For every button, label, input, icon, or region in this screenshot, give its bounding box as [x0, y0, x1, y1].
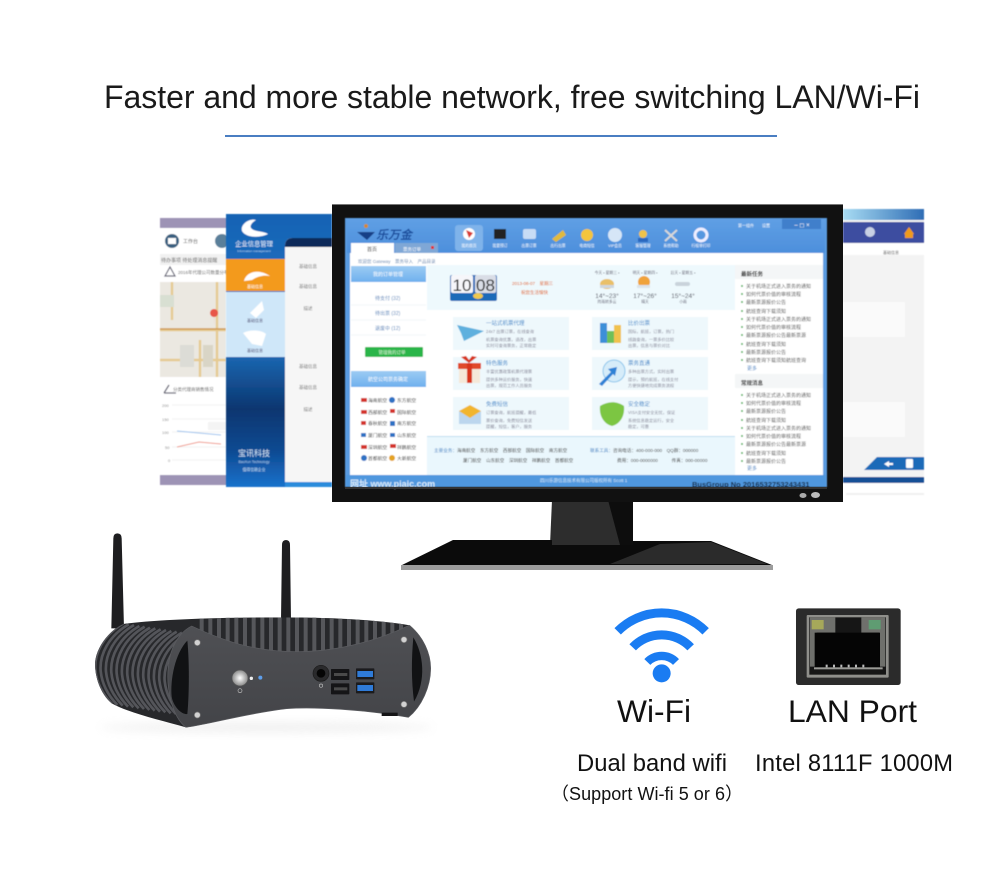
map [160, 282, 226, 377]
right sidebar news lists: 更多 [747, 465, 757, 472]
weather forecast [595, 270, 696, 304]
left column: my tickets: 待支付 (32) [375, 295, 401, 302]
monitor screen: flight booking software: 欢迎您 Gateway 票务导入 产品目录 [358, 258, 436, 265]
toolbar icons: 客服管理 [635, 243, 651, 248]
right sidebar news lists: 关于机场正式进入票务的通知 [746, 392, 811, 399]
Wi-Fi support note: （Support Wi-fi 5 or 6） [551, 784, 743, 804]
icon: gift box [458, 356, 481, 383]
monitor [332, 204, 843, 570]
service cards: 出票，规范工作人员服务 [486, 382, 533, 389]
right sidebar news lists: 最新票源报价公告 [746, 299, 786, 306]
toolbar icons: 行程单打印 [692, 243, 711, 248]
panel: right app window behind monitor [843, 209, 924, 495]
weather forecast: 今天 • 星期三 • [595, 270, 620, 275]
panel: enterprise information app window: 基础信息 [299, 363, 317, 370]
weather forecast: 17°~26° [633, 292, 657, 300]
toolbar icons: 我的首页 [461, 243, 477, 248]
monitor screen: flight booking software [345, 218, 827, 489]
panel: dashboard app window behind monitor: 分类代理商销售情况 [173, 386, 214, 393]
title underline [225, 135, 777, 137]
weather forecast: 明天 • 星期四 • [633, 270, 658, 275]
toolbar icons: 系统帮助 [663, 243, 679, 248]
toolbar icons: 出票订票 [521, 243, 537, 248]
right sidebar news lists: 关于机场正式进入票务的通知 [746, 316, 811, 323]
service cards: 一站式机票代理 [486, 319, 525, 327]
service cards: 实时可查询票务，正常稳定 [486, 342, 536, 349]
panel: enterprise information app window: 企业信息管理 [235, 239, 274, 248]
line chart: 150 [162, 417, 169, 422]
icon: paper plane [457, 325, 484, 341]
service cards: 稳定，可靠 [628, 423, 649, 430]
screen bottom edge shadow [345, 487, 827, 489]
panel: enterprise information app window: 基础信息 [299, 283, 317, 290]
right sidebar news lists: 更多 [747, 365, 757, 372]
bottom contact strip: 费用：000-0000000 传真：000-00000 [617, 457, 708, 464]
line chart [162, 403, 232, 463]
weather forecast: 阵雨转多云 [598, 299, 617, 304]
panel: dashboard app window behind monitor: 工作台 [183, 238, 198, 245]
monitor stand neck [550, 500, 633, 546]
right sidebar news lists: 常规消息 [741, 379, 764, 387]
panel: enterprise information app window: 值得信赖企业 [243, 467, 266, 472]
service cards: 提示，预约航班，在线支付 [628, 376, 678, 383]
tabs: 首页 [367, 246, 377, 253]
title: Faster and more stable network, free switching LAN/Wi-Fi [104, 79, 920, 115]
left column: airlines: 山东航空 [397, 432, 416, 439]
service cards: 比价出票 [628, 319, 651, 327]
left column: airlines: 南方航空 [397, 420, 416, 427]
right sidebar news lists [735, 265, 823, 475]
service cards: 订票查询，航班提醒，最低 [486, 409, 537, 416]
right sidebar news lists: 最新票源报价公告最新票源 [746, 332, 806, 339]
left column: airlines: 国际航空 [397, 409, 416, 416]
panel: enterprise information app window: 描述 [304, 305, 313, 312]
icon: Wi-Fi [618, 613, 706, 682]
toolbar icons: 电商短信 [579, 243, 595, 248]
right sidebar news lists: 航班查询下载须知 [746, 308, 786, 315]
service cards: 出票，信息与票价对比 [628, 342, 670, 349]
line chart: 0 [168, 458, 171, 463]
panel: enterprise information app window: 基础信息 [247, 317, 263, 323]
status bar: 四川乐游信息技术有限公司版权所有 Scott 1 [540, 477, 628, 484]
left column: my tickets [351, 266, 426, 357]
service cards: 特色服务 [486, 359, 509, 367]
left column: airlines: 东方航空 [397, 397, 416, 404]
bottom contact strip [427, 436, 735, 475]
service cards: 安全稳定 [628, 400, 651, 408]
toolbar icons: 设置 [762, 222, 770, 228]
panel: enterprise information app window: 宝讯科技 [238, 448, 270, 458]
LAN chipset description: Intel 8111F 1000M [755, 751, 953, 777]
panel: dashboard app window behind monitor: 待办事项 待处理消息提醒 [161, 257, 217, 264]
bottom contact strip: 厦门航空 山东航空 深圳航空 祥鹏航空 首都航空 [463, 457, 574, 464]
power button and LEDs [232, 670, 262, 693]
panel: enterprise information app window: 描述 [304, 406, 313, 413]
service cards: 丰富优惠政策机票代理票 [486, 368, 532, 375]
audio jack [313, 665, 329, 687]
service cards: 票价查询，免费短信发送 [486, 417, 533, 424]
service cards: VISA支付安全无忧，保证 [628, 409, 676, 416]
left column: airlines [351, 371, 426, 462]
status bar: 网址 www.piaic.com [350, 478, 435, 489]
toolbar icons: 第一组件 [738, 222, 754, 228]
date and weather strip: 2013-08-07 星期三 [512, 281, 554, 287]
panel: dashboard app window behind monitor [160, 218, 238, 485]
service cards: 24x7 出票订票，在线查询 [486, 328, 534, 335]
left column: airlines: 厦门航空 [368, 432, 387, 439]
toolbar icons: VIP会员 [608, 243, 622, 248]
software logo [357, 224, 414, 242]
tabs [351, 243, 438, 254]
right sidebar news lists: 航班查询下载须知航班查询 [746, 357, 806, 364]
icon: target arrow [599, 360, 625, 386]
right sidebar news lists: 如何代票价值的审核流程 [746, 433, 801, 440]
status bar [346, 475, 826, 489]
panel: enterprise information app window: 基础信息 [299, 263, 317, 270]
software logo: 乐万金 [376, 228, 414, 242]
icon: LAN port [796, 608, 901, 685]
line chart: 50 [165, 445, 170, 450]
panel: enterprise information app window: 基础信息 [247, 347, 263, 353]
service cards: 票务直通 [628, 359, 651, 367]
service cards: 线路查询，一票多价比较 [628, 336, 675, 343]
right sidebar news lists: 航班查询下载须知 [746, 341, 786, 348]
right vent [412, 637, 422, 702]
panel: enterprise information app window: Information management [237, 249, 271, 253]
panel: enterprise information app window [226, 214, 332, 487]
tabs: 票务订单 [403, 246, 421, 253]
right antenna [281, 540, 291, 620]
screws [194, 637, 407, 718]
USB 3.0 ports [356, 668, 374, 693]
flip clock: 08 [476, 276, 495, 295]
right sidebar news lists: 最新任务 [741, 270, 764, 278]
right sidebar news lists: 最新票源报价公告 [746, 458, 786, 465]
panel: enterprise information app window: 基础信息 [247, 283, 263, 289]
left column: my tickets: 我的订单管理 [373, 271, 403, 278]
service cards: 免费短信 [486, 400, 509, 408]
floor shadow [100, 723, 433, 732]
bottom contact strip: 联系工具：咨询电话：400-000-000 QQ群：000000 [590, 447, 699, 454]
left column: my tickets: 管理我的订单 [378, 349, 406, 356]
USB 2.0 ports [331, 669, 349, 694]
status bar: BusGroup No 2016532753243431 [692, 480, 810, 489]
right sidebar news lists: 航班查询下载须知 [746, 450, 786, 457]
LAN Port label: LAN Port [788, 693, 917, 729]
toolbar icons: 我要预订 [492, 243, 508, 248]
panel: enterprise information app window: BaoXun Technology [238, 460, 270, 464]
left column: airlines: 大新航空 [397, 455, 416, 462]
service cards: 提供多种运价服务，快速 [486, 376, 533, 383]
toolbar icons: – ◻ × [794, 223, 810, 229]
right sidebar news lists: 航班查询下载须知 [746, 417, 786, 424]
ribbed case body [93, 615, 433, 730]
flip clock: 10 [453, 276, 471, 295]
left vent [171, 641, 189, 714]
right sidebar news lists: 最新票源报价公告 [746, 349, 786, 356]
line chart: 100 [162, 430, 169, 435]
icon: green shield [600, 402, 624, 426]
right sidebar news lists: 如何代票价值的审核流程 [746, 400, 801, 407]
Dual band wifi description: Dual band wifi [577, 750, 727, 777]
date and weather strip: 祝您生活愉快 [521, 289, 548, 296]
right sidebar news lists: 如何代票价值的审核流程 [746, 291, 801, 298]
weather forecast: 晴天 [641, 299, 649, 304]
panel: enterprise information app window: 基础信息 [299, 384, 317, 391]
toolbar icons: 出行出票 [550, 243, 566, 248]
service cards: 提醒，短信，客户，服务 [486, 423, 533, 430]
icon: envelope [459, 405, 481, 424]
Wi-Fi label: Wi-Fi [617, 693, 691, 729]
flip clock [450, 275, 497, 301]
left antenna [111, 533, 124, 628]
mini PC [93, 533, 433, 732]
left column: my tickets: 退废中 (12) [375, 325, 401, 332]
monitor bezel [332, 204, 843, 502]
weather forecast: 15°~24° [671, 292, 695, 300]
panel: right app window behind monitor: 基础信息 [883, 249, 899, 255]
service cards: 系统信息稳定运行，安全 [628, 417, 675, 424]
service cards [453, 317, 708, 430]
left column: airlines: 深圳航空 [368, 444, 387, 451]
left column: my tickets: 待出票 (32) [375, 310, 401, 317]
service cards: 机票查询优惠，退改，出票 [486, 336, 536, 343]
right sidebar news lists: 关于机场正式进入票务的通知 [746, 425, 811, 432]
weather forecast: 14°~23° [595, 292, 619, 300]
bezel buttons [800, 492, 820, 498]
service cards: 国际，航班，订票，热门 [628, 328, 674, 335]
right sidebar news lists: 最新票源报价公告最新票源 [746, 441, 806, 448]
service cards: 多种出票方式，实时出票 [628, 368, 674, 375]
service cards: 方便快捷地完成票务流程 [628, 382, 675, 389]
left column: airlines: 西部航空 [368, 409, 387, 416]
right sidebar news lists: 如何代票价值的审核流程 [746, 324, 801, 331]
line chart: 200 [162, 403, 169, 408]
bottom contact strip: 主要业务：海南航空 东方航空 西部航空 国际航空 南方航空 [434, 447, 568, 454]
right sidebar news lists: 关于机场正式进入票务的通知 [746, 283, 811, 290]
left column: airlines: 祥鹏航空 [397, 444, 416, 451]
panel: dashboard app window behind monitor: 2016年代理公司数量分布地图 [178, 269, 238, 276]
weather forecast: 小雨 [679, 299, 687, 304]
icon: bar chart [600, 323, 621, 343]
weather forecast: 后天 • 星期五 • [671, 270, 696, 275]
right sidebar news lists: 最新票源报价公告 [746, 408, 786, 415]
monitor stand base [401, 540, 773, 570]
front plate [168, 625, 431, 727]
left column: airlines: 航空公司票务确定 [368, 376, 408, 383]
date and weather strip [427, 265, 735, 310]
toolbar icons [455, 219, 821, 251]
case foot [382, 713, 398, 716]
left column: airlines: 首都航空 [368, 455, 387, 462]
left column: airlines: 海南航空 [368, 397, 387, 404]
left column: airlines: 春秋航空 [368, 420, 387, 427]
